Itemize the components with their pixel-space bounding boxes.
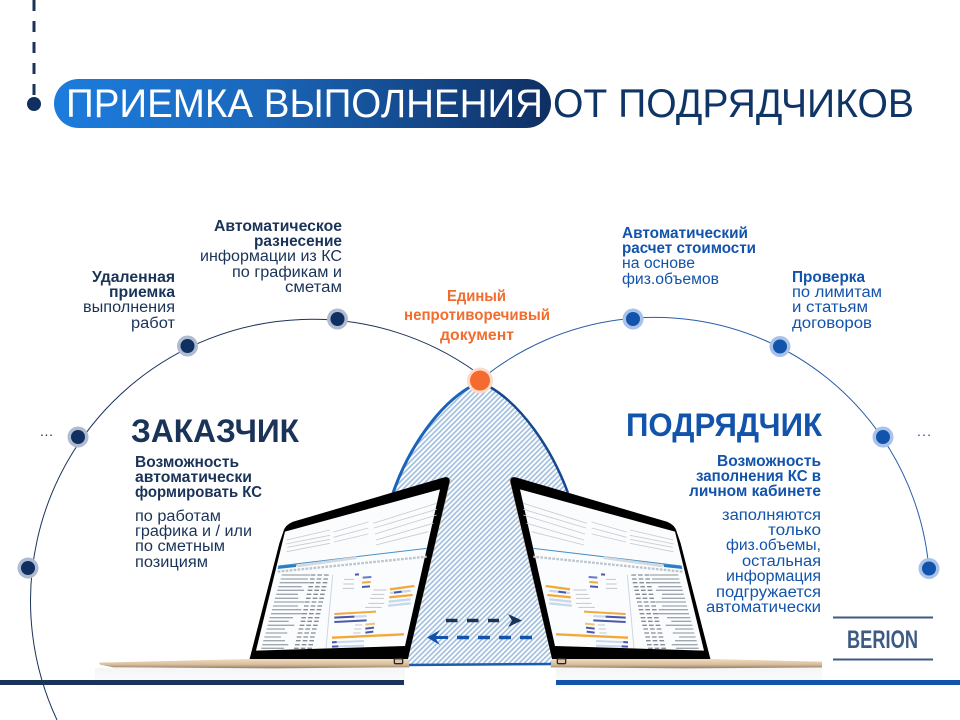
panel: contractor bbox=[626, 407, 822, 616]
contractor nodes bbox=[622, 308, 940, 579]
ellipsis right: ... bbox=[917, 423, 931, 439]
panel: customer: ЗАКАЗЧИК bbox=[131, 413, 299, 449]
label: auto distribution: Автоматическое bbox=[214, 218, 342, 235]
label: remote acceptance: Удаленная bbox=[92, 269, 175, 286]
panel: customer: формировать КС bbox=[135, 484, 262, 501]
label: auto distribution: разнесение bbox=[254, 233, 342, 250]
ellipsis left: ... bbox=[40, 423, 53, 439]
label: remote acceptance bbox=[83, 269, 175, 332]
label: auto cost calculation: на основе bbox=[622, 255, 695, 272]
label: limit check bbox=[792, 269, 882, 332]
panel: customer: по сметным bbox=[135, 538, 225, 555]
customer nodes bbox=[18, 308, 348, 578]
label: limit check: и статьям bbox=[792, 299, 868, 316]
panel: contractor: личном кабинете bbox=[689, 483, 821, 500]
title: ОТ ПОДРЯДЧИКОВ bbox=[553, 82, 914, 126]
panel: customer: позициям bbox=[135, 554, 208, 571]
exchange arrows bbox=[427, 614, 532, 645]
label: remote acceptance: выполнения bbox=[83, 299, 175, 316]
logo: BERION: BERION bbox=[847, 626, 918, 654]
label: auto distribution: сметам bbox=[285, 279, 342, 296]
shadow under laptops bbox=[95, 668, 822, 692]
footer bar: left bbox=[0, 680, 404, 685]
panel: contractor: только bbox=[768, 522, 821, 539]
arc: contractor bbox=[484, 317, 929, 570]
label: single document bbox=[404, 288, 550, 344]
panel: customer: автоматически bbox=[135, 469, 252, 486]
right laptop bbox=[509, 477, 861, 668]
label: single document: документ bbox=[440, 327, 514, 344]
footer bar: right bbox=[556, 680, 960, 685]
panel: contractor: заполняются bbox=[722, 507, 821, 524]
title: ПРИЕМКА ВЫПОЛНЕНИЯ bbox=[66, 82, 543, 126]
panel: contractor: остальная bbox=[742, 553, 821, 570]
title bbox=[54, 79, 914, 128]
panel: contractor: физ.объемы, bbox=[726, 537, 821, 554]
label: single document: Единый bbox=[447, 288, 506, 305]
label: remote acceptance: приемка bbox=[109, 284, 175, 301]
label: limit check: по лимитам bbox=[792, 284, 882, 301]
panel: contractor: ПОДРЯДЧИК bbox=[626, 407, 822, 443]
panel: customer: Возможность bbox=[135, 454, 239, 471]
label: auto cost calculation: Автоматический bbox=[622, 225, 748, 242]
label: remote acceptance: работ bbox=[131, 315, 175, 332]
panel: customer: графика и / или bbox=[135, 523, 252, 540]
panel: contractor: Возможность bbox=[717, 453, 821, 470]
panel: contractor: автоматически bbox=[706, 599, 821, 616]
shared document hatched shape bbox=[393, 381, 568, 665]
decorative dashed line with dot bbox=[27, 0, 41, 111]
label: limit check: Проверка bbox=[792, 269, 865, 286]
label: auto distribution: информации из КС bbox=[200, 248, 342, 265]
logo: BERION bbox=[822, 612, 960, 674]
panel: contractor: информация bbox=[726, 568, 821, 585]
label: auto cost calculation: расчет стоимости bbox=[622, 240, 756, 257]
panel: customer: по работам bbox=[135, 508, 221, 525]
label: auto cost calculation bbox=[622, 225, 756, 288]
arc: customer bbox=[31, 319, 476, 720]
label: limit check: договоров bbox=[792, 315, 872, 332]
panel: customer bbox=[131, 413, 299, 571]
label: auto cost calculation: физ.объемов bbox=[622, 271, 719, 288]
panel: contractor: подгружается bbox=[716, 584, 821, 601]
label: auto distribution: по графикам и bbox=[232, 264, 342, 281]
label: single document: непротиворечивый bbox=[404, 307, 550, 324]
central orange node bbox=[467, 368, 493, 394]
label: auto distribution bbox=[200, 218, 342, 296]
panel: contractor: заполнения КС в bbox=[696, 468, 821, 485]
left laptop bbox=[99, 477, 451, 668]
